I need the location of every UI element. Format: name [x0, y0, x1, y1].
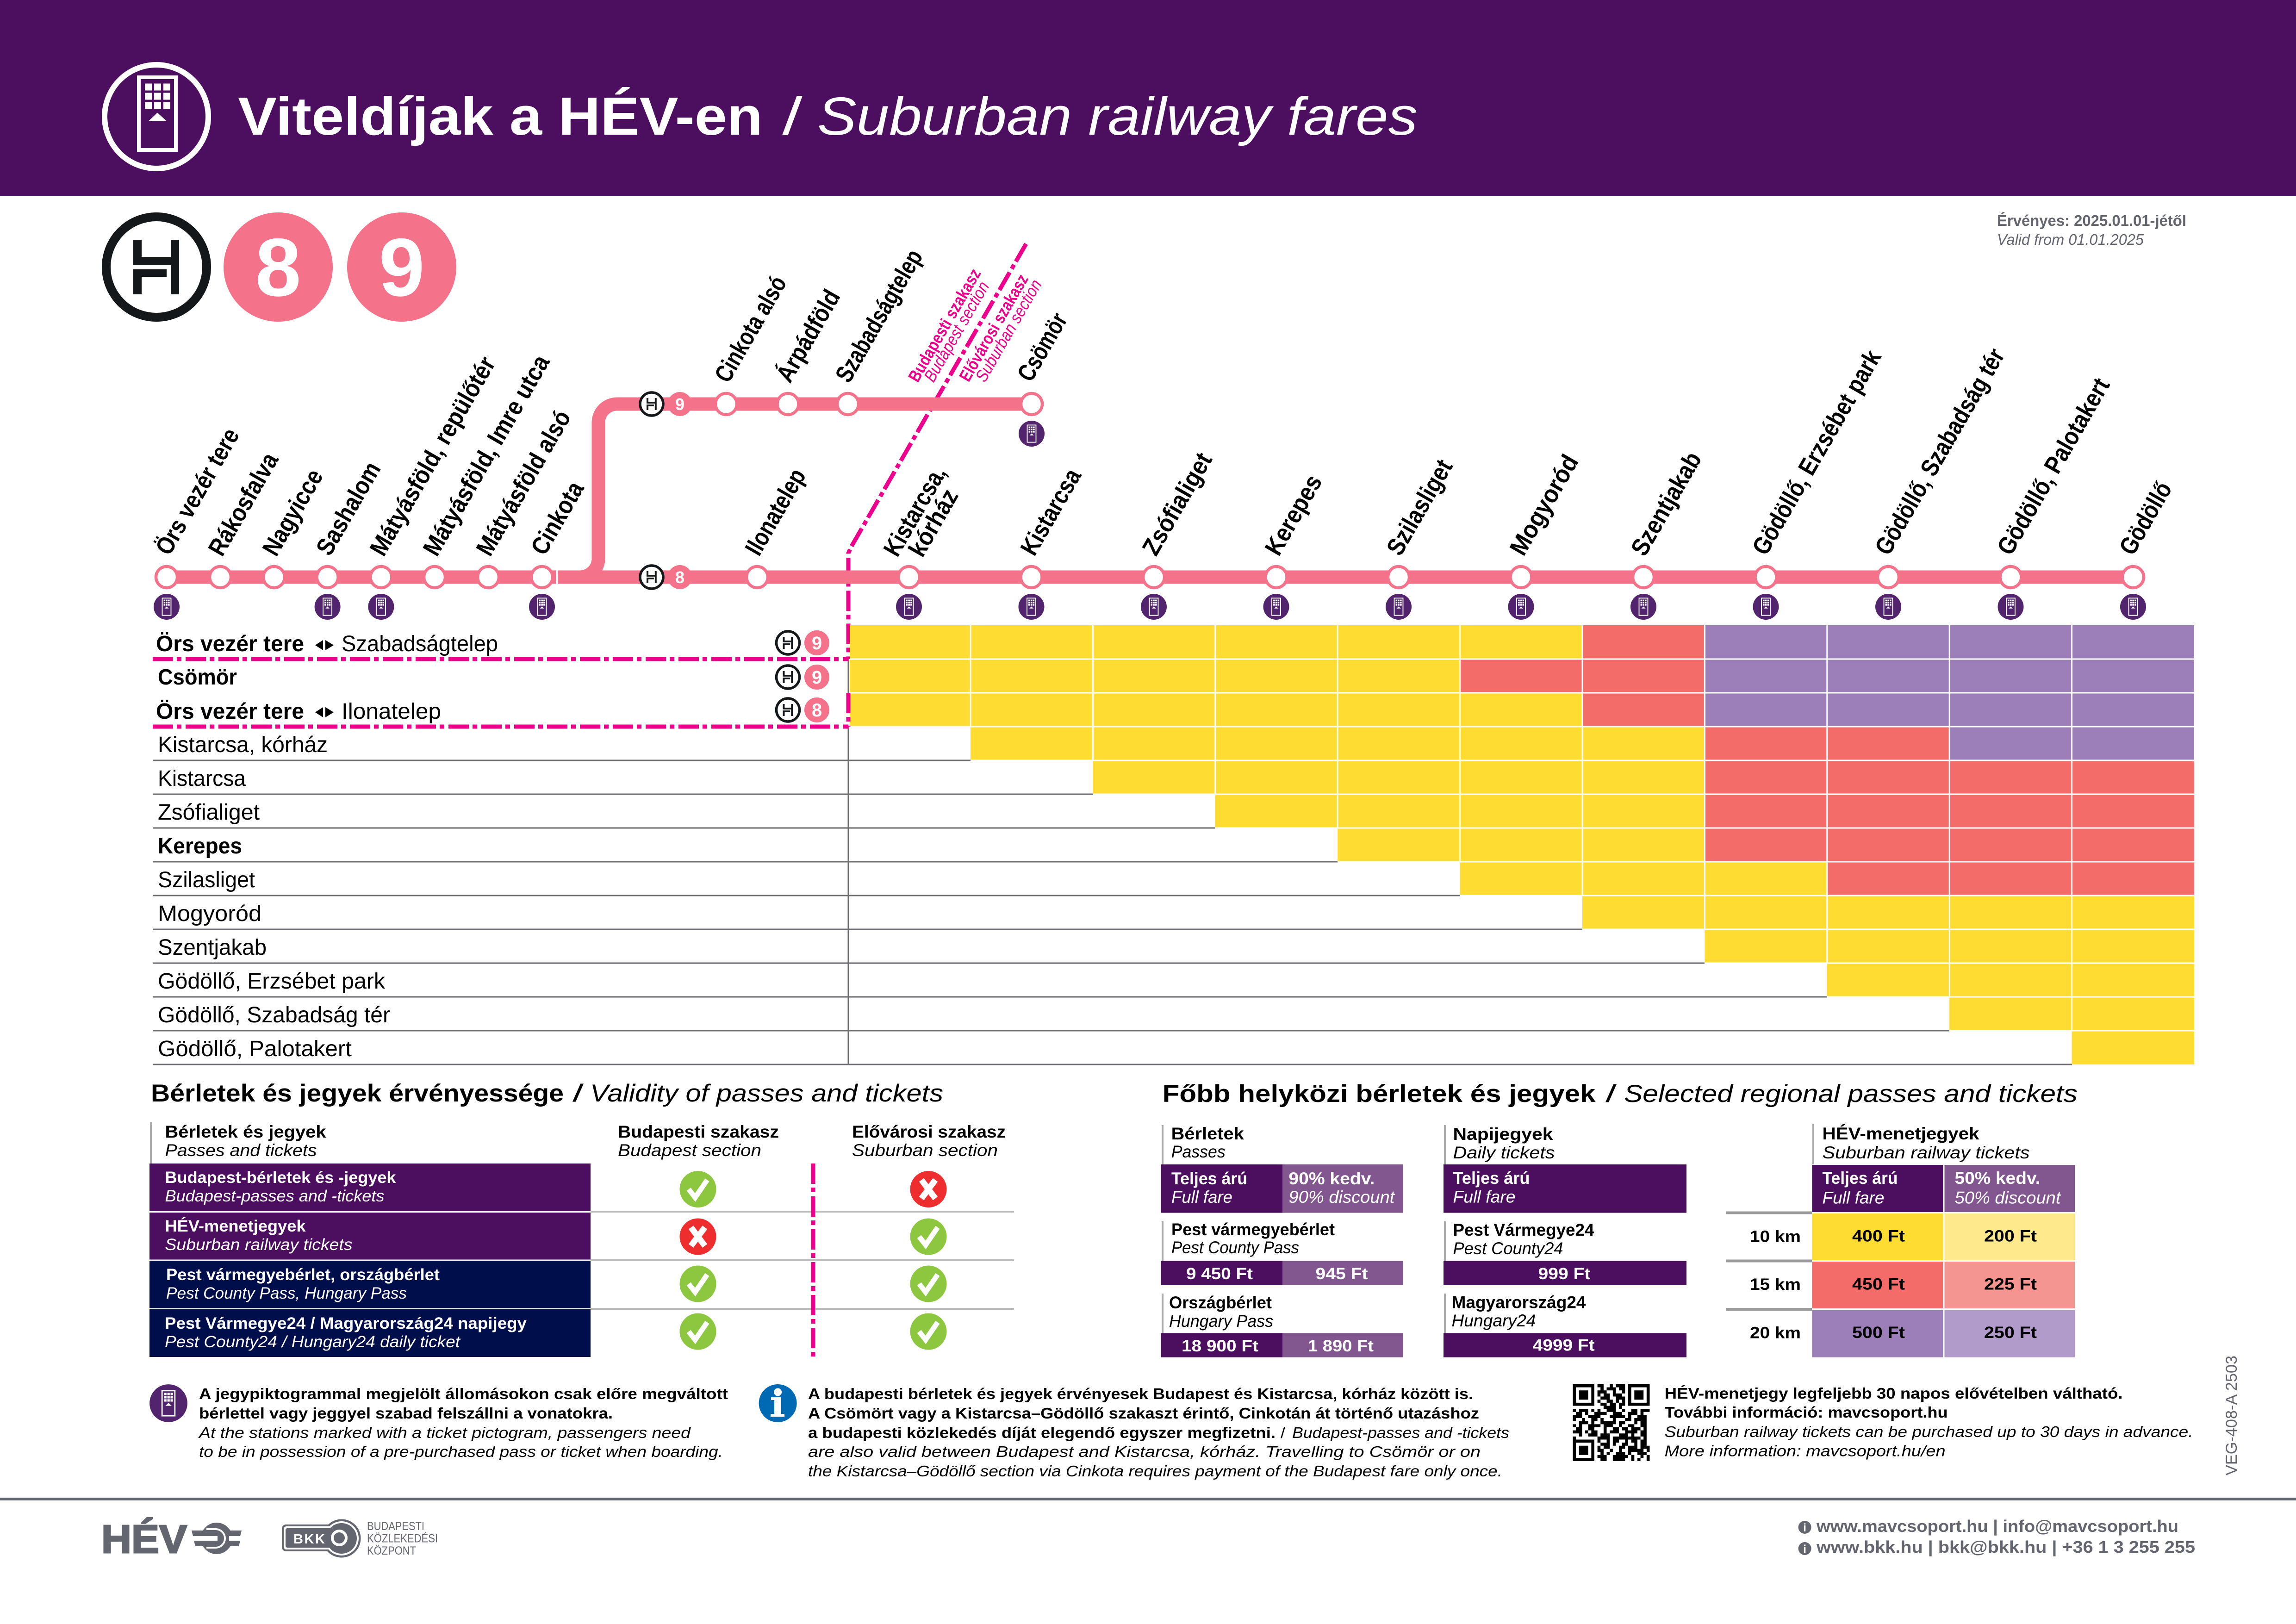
logo: BKK: KÖZLEKEDÉSI [367, 1532, 438, 1545]
station: Ilonatelep: Ilonatelep [740, 464, 811, 560]
note: advance purchase: More information: mavcsoport.hu/en [1665, 1443, 1946, 1460]
footer rule [0, 1498, 2296, 1500]
station: Örs vezér tere: Örs vezér tere [150, 423, 245, 560]
icon: info MÁV [1798, 1521, 1811, 1534]
station: Mátyásföld, repülőtér [364, 352, 501, 620]
section boundary labels: Budapesti szakasz [904, 265, 984, 385]
station: Zsófialiget: Zsófialiget [1137, 448, 1218, 560]
10 km prices [1750, 1213, 2075, 1260]
row label: Csömör: 9 [812, 667, 822, 688]
heading: validity: Bérletek és jegyek érvényessége [151, 1080, 564, 1107]
fare matrix [153, 625, 2194, 1064]
station: Cinkota alsó [709, 271, 792, 415]
row labels: stations: Zsófialiget [158, 800, 260, 825]
boundary line between Budapest and suburban sections [848, 244, 1026, 659]
row label: Örs vezér tere – Szabadságtelep: Szabadságtelep [342, 632, 498, 656]
table header: Budapest section [618, 1141, 761, 1160]
row label: Örs vezér tere – Szabadságtelep: Örs vezér tere [156, 632, 304, 656]
heading: regional passes: Főbb helyközi bérletek és jegyek [1163, 1080, 1596, 1108]
note: Budapest passes validity: a budapesti közlekedés díját elegendő egyszer megfizetni. [808, 1424, 1276, 1441]
note: advance purchase: Suburban railway tickets can be purchased up to 30 days in advance. [1665, 1423, 2193, 1440]
row label: Örs vezér tere – Ilonatelep: 8 [812, 700, 822, 721]
station: Gödöllő: Gödöllő [2114, 477, 2178, 560]
station: Kerepes [1259, 470, 1327, 620]
station: Mogyoród [1504, 450, 1584, 620]
daily tickets header [1444, 1125, 1686, 1213]
Hungary24: Hungary24 [1451, 1311, 1536, 1330]
daily tickets header: Daily tickets [1453, 1143, 1555, 1162]
daily tickets header: Teljes árú [1453, 1169, 1530, 1188]
station: Mátyásföld, Imre utca: Mátyásföld, Imre utca [417, 350, 555, 560]
Hungary pass: 1 890 Ft [1308, 1337, 1374, 1355]
logo: HÉV: HÉV [101, 1518, 187, 1562]
station: Cinkota [525, 476, 590, 620]
station: Kistarcsa [1015, 464, 1087, 620]
icon: info MÁV: i [1803, 1522, 1806, 1534]
15 km prices: 225 Ft [1984, 1275, 2037, 1293]
station: Mátyásföld alsó: Mátyásföld alsó [471, 405, 576, 560]
station: Kistarcsa: Kistarcsa [1015, 464, 1087, 560]
logo: BKK: BKK [293, 1532, 325, 1547]
10 km prices: 200 Ft [1984, 1227, 2037, 1245]
Pest county pass: Pest County Pass [1171, 1238, 1299, 1257]
station: Sashalom [311, 457, 386, 620]
row label: Csömör: Csömör [158, 665, 237, 690]
Pest County24: Pest Vármegye24 [1453, 1220, 1594, 1239]
station: Gödöllő, Erzsébet park: Gödöllő, Erzsébet park [1747, 345, 1887, 560]
logo: BKK [282, 1519, 438, 1558]
Pest county pass: 945 Ft [1315, 1265, 1368, 1283]
title [238, 86, 1418, 146]
station: Gödöllő [2114, 477, 2178, 620]
header band [0, 0, 2296, 196]
row: suburban tickets [149, 1213, 947, 1260]
note: advance purchase: HÉV-menetjegy legfeljebb 30 napos elővételben váltható. [1665, 1385, 2123, 1402]
heading: regional passes: / [1605, 1080, 1617, 1108]
row label: Örs vezér tere – Szabadságtelep [156, 630, 829, 656]
fare zones: red [1460, 625, 2194, 896]
note: Budapest passes validity: Budapest-passes and -tickets [1292, 1424, 1509, 1441]
Hungary pass: Hungary Pass [1169, 1312, 1273, 1331]
icon: ticket machine in circle [105, 65, 208, 168]
validity date: Érvényes: 2025.01.01-jétől [1997, 212, 2186, 229]
section boundary labels [904, 265, 1045, 385]
heading: regional passes: Selected regional passes and tickets [1624, 1080, 2078, 1108]
contact details: www.mavcsoport.hu | info@mavcsoport.hu [1816, 1517, 2178, 1536]
station: Kistarcsa, kórház: kórház [903, 484, 964, 561]
Pest county pass: Pest vármegyebérlet [1171, 1220, 1335, 1239]
station: Zsófialiget [1137, 448, 1218, 620]
15 km prices: 450 Ft [1852, 1275, 1905, 1293]
station: Mátyásföld, repülőtér: Mátyásföld, repülőtér [364, 352, 501, 560]
note: advance purchase [1665, 1385, 2193, 1460]
validity date [1997, 212, 2186, 248]
row: county and country pass [149, 1261, 947, 1308]
daily tickets header: Full fare [1453, 1188, 1515, 1206]
row label: Csömör [158, 665, 829, 690]
station: Gödöllő, Palotakert [1991, 373, 2115, 620]
note: Budapest passes validity: the Kistarcsa–Gödöllő section via Cinkota requires payment of the Budapest fare only once. [808, 1462, 1502, 1480]
suburban tickets header: 50% kedv. [1955, 1169, 2040, 1188]
station: Árpádföld [771, 285, 846, 415]
note: advance purchase: További információ: mavcsoport.hu [1665, 1404, 1948, 1421]
suburban tickets header [1812, 1124, 2075, 1212]
note: ticket pictogram [149, 1384, 728, 1460]
row: suburban tickets: Suburban railway tickets [165, 1236, 353, 1254]
note: ticket pictogram: At the stations marked with a ticket pictogram, passengers need [198, 1424, 691, 1441]
station: Rákosfalva [203, 448, 284, 588]
station: Örs vezér tere [150, 423, 245, 620]
station: Cinkota alsó: Cinkota alsó [709, 271, 792, 387]
section boundary labels: Suburban section [971, 276, 1045, 385]
table header: Elővárosi szakasz [852, 1122, 1006, 1141]
row labels: stations: Kistarcsa [158, 766, 246, 791]
row labels: stations: Kerepes [158, 834, 242, 859]
station: Gödöllő, Erzsébet park [1747, 345, 1887, 620]
station: Szilasliget [1381, 455, 1458, 620]
document code: VEG-408-A 2503 [2223, 1356, 2240, 1475]
validity date: Valid from 01.01.2025 [1997, 231, 2144, 248]
station: Szentjakab: Szentjakab [1625, 447, 1707, 560]
title: Suburban railway fares [817, 86, 1418, 146]
section boundary dashes on rows [153, 659, 848, 727]
20 km prices: 20 km [1750, 1324, 1801, 1342]
logo: BKK: BUDAPESTI [367, 1520, 424, 1533]
15 km prices [1750, 1262, 2075, 1308]
panel: suburban railway tickets [1726, 1124, 2075, 1357]
20 km prices: 250 Ft [1984, 1324, 2037, 1342]
row: Budapest passes: Budapest-passes and -tickets [165, 1187, 384, 1205]
suburban tickets header: Full fare [1823, 1188, 1885, 1207]
station: Csömör: Csömör [1012, 308, 1073, 386]
station: Ilonatelep [740, 464, 811, 588]
heading: validity [151, 1080, 943, 1107]
passes header: Full fare [1171, 1188, 1232, 1207]
20 km prices: 500 Ft [1852, 1324, 1905, 1342]
line badges: H 8 9: 8 [255, 221, 301, 313]
section boundary labels: Elővárosi szakasz [955, 271, 1032, 385]
Hungary pass: 18 900 Ft [1182, 1337, 1258, 1355]
suburban tickets header: Suburban railway tickets [1823, 1143, 2030, 1162]
Hungary pass [1161, 1293, 1403, 1357]
station: Kistarcsa, kórház [878, 461, 964, 620]
Pest County24: Pest County24 [1453, 1239, 1563, 1258]
fare zones: yellow [850, 625, 2194, 1064]
10 km prices: 10 km [1750, 1227, 1801, 1246]
table header: Bérletek és jegyek [165, 1122, 326, 1141]
line 8 badge: 8 [675, 568, 684, 587]
note: Budapest passes validity: A budapesti bérletek és jegyek érvényesek Budapest és Kistarcsa, kórház között is. [808, 1385, 1473, 1402]
passes header [1161, 1124, 1403, 1213]
contact details: www.bkk.hu | bkk@bkk.hu | +36 1 3 255 255 [1816, 1537, 2195, 1557]
line 9 branch badge [640, 392, 692, 416]
station: Szentjakab [1625, 447, 1707, 620]
row: daily tickets: Pest Vármegye24 / Magyarország24 napijegy [165, 1314, 527, 1332]
15 km prices: 15 km [1750, 1276, 1801, 1294]
row labels: stations: Szilasliget [158, 868, 255, 892]
Pest county pass [1161, 1220, 1403, 1285]
station: Mátyásföld alsó [471, 405, 576, 588]
logo: HÉV [101, 1518, 242, 1562]
row: county and country pass: Pest vármegyebérlet, országbérlet [166, 1266, 440, 1284]
row: daily tickets: Pest County24 / Hungary24 daily ticket [165, 1333, 460, 1351]
note: Budapest passes validity [759, 1384, 1509, 1480]
row: Budapest passes: Budapest-bérletek és -jegyek [165, 1169, 396, 1187]
Pest County24: 999 Ft [1538, 1265, 1591, 1283]
panel: passes [1161, 1124, 1403, 1357]
icon: ticket pictogram [149, 1384, 187, 1422]
title: / [782, 86, 803, 146]
station: Cinkota: Cinkota [525, 476, 590, 560]
row: daily tickets [149, 1309, 947, 1357]
Hungary24: 4999 Ft [1533, 1337, 1595, 1355]
panel: validity table [149, 1122, 1014, 1357]
route line map [150, 245, 2178, 620]
row labels: stations [158, 733, 390, 1061]
row label: Örs vezér tere – Ilonatelep: Ilonatelep [342, 699, 441, 724]
note: ticket pictogram: A jegypiktogrammal megjelölt állomásokon csak előre megváltott [199, 1385, 728, 1402]
station: Sashalom: Sashalom [311, 457, 386, 560]
station: Gödöllő, Szabadság tér [1869, 344, 2010, 620]
Pest county pass: 9 450 Ft [1186, 1265, 1253, 1283]
heading: validity: Validity of passes and tickets [590, 1080, 943, 1107]
station: Szabadságtelep: Szabadságtelep [830, 245, 928, 387]
Hungary pass: Országbérlet [1169, 1293, 1272, 1312]
Pest County24 [1444, 1220, 1686, 1285]
row labels: stations: Gödöllő, Erzsébet park [158, 969, 386, 994]
suburban tickets header: 50% discount [1955, 1188, 2061, 1207]
passes header: 90% discount [1288, 1188, 1395, 1207]
title: Viteldíjak a HÉV-en [238, 86, 763, 146]
station: Mogyoród: Mogyoród [1504, 450, 1584, 560]
table header: Passes and tickets [165, 1141, 317, 1160]
heading: validity: / [572, 1080, 584, 1107]
row: Budapest passes [149, 1164, 947, 1211]
row labels: stations: Gödöllő, Szabadság tér [158, 1003, 390, 1027]
row labels: stations: Szentjakab [158, 935, 267, 960]
daily tickets header: Napijegyek [1453, 1125, 1553, 1144]
suburban tickets header: Teljes árú [1823, 1169, 1898, 1188]
row label: Örs vezér tere – Ilonatelep [156, 697, 829, 724]
10 km prices: 400 Ft [1852, 1227, 1905, 1245]
row: county and country pass: Pest County Pass, Hungary Pass [166, 1284, 407, 1302]
line badges: H 8 9 [106, 212, 456, 322]
passes header: Teljes árú [1171, 1169, 1247, 1188]
station: Kistarcsa, kórház: Kistarcsa, [878, 461, 952, 561]
QR code [1573, 1384, 1649, 1461]
icon: info BKK [1798, 1542, 1811, 1556]
heading: regional passes [1163, 1080, 2078, 1108]
note: ticket pictogram: bérlettel vagy jeggyel szabad felszállni a vonatokra. [199, 1405, 613, 1422]
note: Budapest passes validity: / [1281, 1424, 1286, 1441]
Hungary24: Magyarország24 [1451, 1293, 1586, 1312]
station: Nagyicce: Nagyicce [257, 464, 329, 560]
row labels: stations: Mogyoród [158, 902, 261, 926]
icon: info [759, 1384, 797, 1422]
icon: info BKK: i [1803, 1543, 1806, 1556]
note: ticket pictogram: to be in possession of a pre-purchased pass or ticket when boarding. [199, 1443, 723, 1460]
table header [150, 1122, 1006, 1164]
note: Budapest passes validity: A Csömört vagy a Kistarcsa–Gödöllő szakaszt érintő, Cinkotán át történő utazáshoz [808, 1405, 1479, 1422]
row label: Örs vezér tere – Ilonatelep: Örs vezér tere [156, 699, 304, 724]
table header: Budapesti szakasz [618, 1122, 779, 1141]
logo: BKK: KÖZPONT [367, 1544, 416, 1557]
row labels: stations: Kistarcsa, kórház [158, 733, 328, 757]
suburban tickets header: HÉV-menetjegyek [1823, 1124, 1979, 1143]
line 9 branch badge: 9 [675, 395, 684, 414]
station: Gödöllő, Szabadság tér: Gödöllő, Szabadság tér [1869, 344, 2010, 560]
panel: daily tickets [1444, 1125, 1686, 1357]
line badges: H 8 9: 9 [379, 221, 425, 313]
fare zones: purple [1705, 625, 2194, 760]
contact details [1798, 1517, 2195, 1557]
station: Gödöllő, Palotakert: Gödöllő, Palotakert [1991, 373, 2115, 560]
station: Kerepes: Kerepes [1259, 470, 1327, 560]
station: Árpádföld: Árpádföld [771, 285, 846, 387]
20 km prices [1750, 1310, 2075, 1357]
section boundary labels: Budapest section [920, 278, 993, 385]
row lines [153, 659, 2072, 1064]
table header: Suburban section [852, 1141, 998, 1160]
passes header: Passes [1171, 1142, 1226, 1161]
passes header: 90% kedv. [1288, 1169, 1375, 1188]
station: Rákosfalva: Rákosfalva [203, 448, 284, 560]
row label: Örs vezér tere – Szabadságtelep: 9 [812, 633, 822, 653]
station: Nagyicce [257, 464, 329, 588]
Hungary24 [1444, 1293, 1686, 1357]
row labels: stations: Gödöllő, Palotakert [158, 1037, 352, 1061]
station: Csömör [1012, 308, 1073, 447]
row: suburban tickets: HÉV-menetjegyek [165, 1217, 306, 1235]
line 8 badge [640, 565, 692, 589]
passes header: Bérletek [1171, 1124, 1244, 1143]
station: Szabadságtelep [830, 245, 928, 415]
station: Szilasliget: Szilasliget [1381, 455, 1458, 560]
note: Budapest passes validity: are also valid between Budapest and Kistarcsa, kórház. Travelling to Csömör or on [808, 1443, 1481, 1460]
